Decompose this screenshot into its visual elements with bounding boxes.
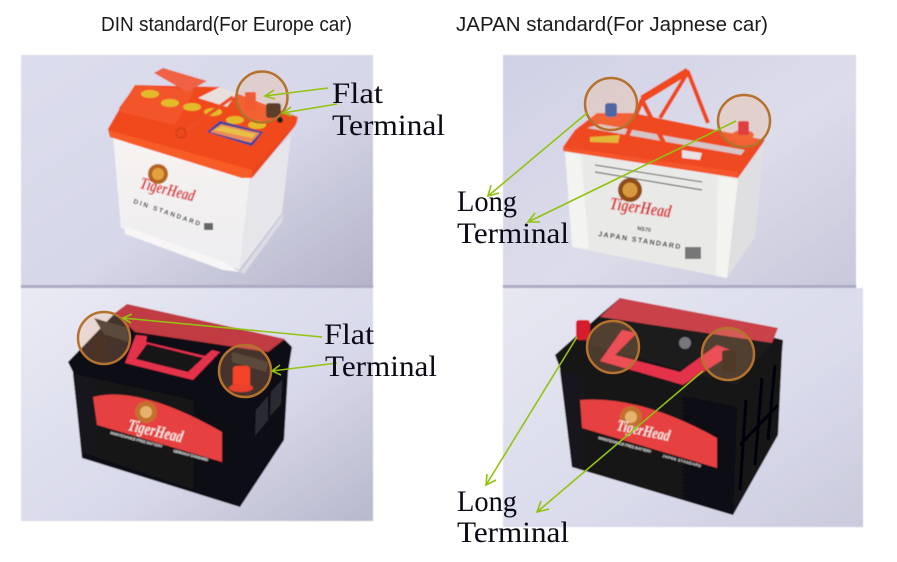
label: Long Terminal, bottom right: Long xyxy=(457,485,517,518)
photo: Japan black battery xyxy=(503,285,863,527)
label: Flat Terminal, bottom left: Flat xyxy=(324,318,375,351)
arrow xyxy=(537,371,703,512)
arrow xyxy=(486,337,577,485)
arrow xyxy=(283,104,337,116)
arrow xyxy=(123,314,322,337)
callout circle xyxy=(219,345,271,397)
callout circle xyxy=(585,78,637,130)
callout circle xyxy=(718,95,770,147)
label: Long Terminal, top right: Long xyxy=(457,185,517,218)
photo: Japan white battery: JAPAN STANDARD xyxy=(598,231,681,251)
photo: DIN black battery: MAINTENANCE FREE BATTERY xyxy=(110,430,164,449)
callout circle xyxy=(702,328,754,380)
photo: DIN black battery xyxy=(21,285,373,521)
arrow xyxy=(265,88,328,99)
photo: DIN white battery: DIN STANDARD xyxy=(132,198,201,228)
photo: Japan black battery: JAPAN STANDARD xyxy=(662,453,702,468)
callout circle xyxy=(587,321,639,373)
photo: Japan black battery: MAINTENANCE FREE BATTERY xyxy=(598,435,652,454)
photo: Japan white battery: TigerHead xyxy=(608,193,673,222)
photo: DIN black battery: GERMANY STANDARD xyxy=(173,448,209,462)
arrow xyxy=(528,121,736,222)
photo: DIN white battery: TigerHead xyxy=(138,173,197,206)
photo: DIN white battery xyxy=(21,55,373,288)
label: Flat Terminal, top left: Terminal xyxy=(332,109,445,142)
label: Flat Terminal, bottom left: Terminal xyxy=(325,350,437,383)
title: JAPAN standard: JAPAN standard(For Japnese car) xyxy=(456,14,768,36)
title: DIN standard: DIN standard(For Europe car) xyxy=(101,14,352,36)
photo: Japan black battery: TigerHead xyxy=(615,417,672,445)
photo: DIN black battery: TigerHead xyxy=(126,415,185,447)
label: Long Terminal, bottom right: Terminal xyxy=(457,516,569,549)
arrow xyxy=(272,363,337,375)
callout circle xyxy=(78,312,130,364)
photo: Japan white battery: NS70 xyxy=(637,226,651,234)
label: Long Terminal, top right: Terminal xyxy=(457,217,569,250)
arrow xyxy=(488,113,587,196)
callout circle xyxy=(236,72,288,122)
label: Flat Terminal, top left: Flat xyxy=(332,77,384,110)
photo: Japan white battery xyxy=(503,55,856,288)
